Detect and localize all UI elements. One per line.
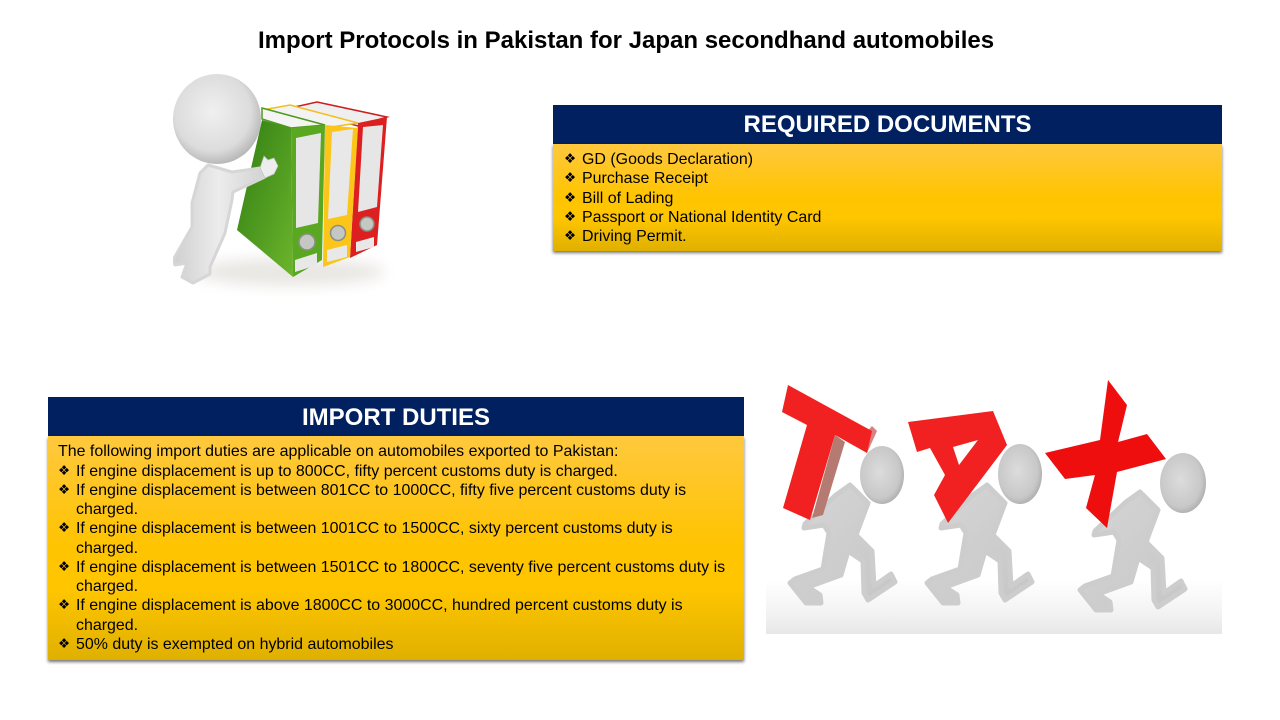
list: required documents: Passport or National Identity Card [582,208,821,226]
figure: letter X carrier [1045,380,1206,610]
panel: import duties [46,397,746,664]
text: import duties list: ❖ [58,482,70,498]
text: import duties list: ❖ [58,558,70,574]
list: required documents: Bill of Lading [582,190,673,206]
text: import duties list: charged. [76,578,138,595]
text: import duties list: The following import duties are applicable on automobiles exported to Pakistan: [58,443,618,460]
text: import duties list: ❖ [58,462,70,478]
list: required documents: ❖ [564,190,576,206]
icon: person pushing document binders [173,74,390,290]
heading: import duties [48,397,744,436]
text: import duties list: ❖ [58,597,70,613]
text: import duties list: If engine displacement is above 1800CC to 3000CC, hundred percent customs duty is [76,597,683,614]
list: required documents: Driving Permit. [582,228,687,244]
text: import duties list: 50% duty is exempted on hybrid automobiles [76,636,393,652]
text: import duties list: ❖ [58,520,70,536]
list: required documents: ❖ [564,208,576,224]
list: required documents: ❖ [564,151,576,167]
text: import duties list: If engine displacement is up to 800CC, fifty percent customs duty is charged. [76,462,618,480]
text: import duties list: If engine displacement is between 1501CC to 1800CC, seventy five percent customs duty is [76,558,725,576]
text: import duties list: If engine displacement is between 1001CC to 1500CC, sixty percent customs duty is [76,520,673,537]
list: required documents: Purchase Receipt [582,170,708,187]
text: import duties list: charged. [76,540,138,556]
heading: import duties: IMPORT DUTIES [302,404,490,431]
title: Import Protocols in Pakistan for Japan secondhand automobiles [258,27,994,54]
figure: letter A carrier [908,411,1042,603]
text: import duties list: charged. [76,501,138,518]
text: import duties list: charged. [76,616,138,634]
list: required documents: ❖ [564,228,576,244]
list: required documents: ❖ [564,170,576,186]
figure: letter T carrier [782,385,904,603]
text: import duties list: ❖ [58,636,70,652]
icon: three figures carrying the letters of TAX [766,380,1222,634]
panel: required documents [550,105,1224,256]
list: required documents [553,144,1222,251]
text: import duties list: If engine displacement is between 801CC to 1000CC, fifty five percent customs duty is [76,482,686,498]
heading: required documents: REQUIRED DOCUMENTS [743,111,1032,138]
list: required documents: GD (Goods Declaration) [582,151,753,168]
text: import duties list [48,436,744,660]
heading: required documents [553,105,1222,144]
